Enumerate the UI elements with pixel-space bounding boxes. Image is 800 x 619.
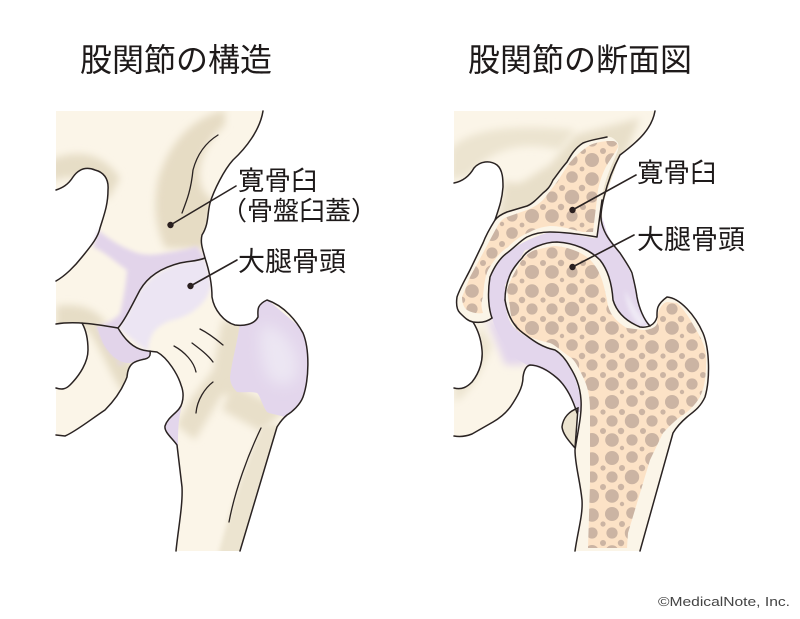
callout: femoral head, left: 大腿骨頭 — [238, 247, 346, 277]
lesser trochanter purple — [166, 406, 182, 446]
panel: hip joint cross section illustration — [450, 111, 709, 551]
greater trochanter purple — [230, 301, 307, 416]
femur section — [505, 242, 709, 551]
pelvis bone section — [450, 111, 655, 436]
acetabulum section — [457, 137, 618, 322]
callout: acetabulum, left — [167, 166, 318, 228]
femur spongy bone — [507, 246, 706, 548]
callout: femoral head, left — [187, 247, 346, 289]
callout: acetabulum, right: 寛骨臼 — [637, 158, 716, 188]
acetabulum purple cartilage — [93, 230, 205, 365]
lesser trochanter — [562, 408, 578, 448]
section outlines — [454, 111, 709, 551]
joint capsule purple — [570, 217, 650, 327]
copyright: ©MedicalNote, Inc. — [658, 594, 790, 609]
callout: femoral head, right — [569, 225, 745, 270]
inner surface lines — [174, 135, 261, 522]
panel: hip joint structure illustration — [50, 110, 315, 555]
title: hip joint structure: 股関節の構造 — [80, 42, 272, 78]
callout: acetabular roof note: （骨盤臼蓋） — [221, 196, 377, 226]
bone outlines — [56, 111, 308, 551]
callout: acetabulum, right — [569, 158, 716, 213]
callout: acetabulum, left: 寛骨臼 — [238, 166, 318, 196]
title: hip joint cross section: 股関節の断面図 — [468, 42, 692, 78]
callout: femoral head, right: 大腿骨頭 — [637, 225, 745, 255]
femur bone — [118, 258, 315, 555]
acetabulum spongy bone — [462, 141, 618, 313]
pelvis bone — [50, 110, 263, 436]
femoral head purple — [118, 258, 212, 352]
soft purple blending on pelvis — [486, 318, 530, 365]
